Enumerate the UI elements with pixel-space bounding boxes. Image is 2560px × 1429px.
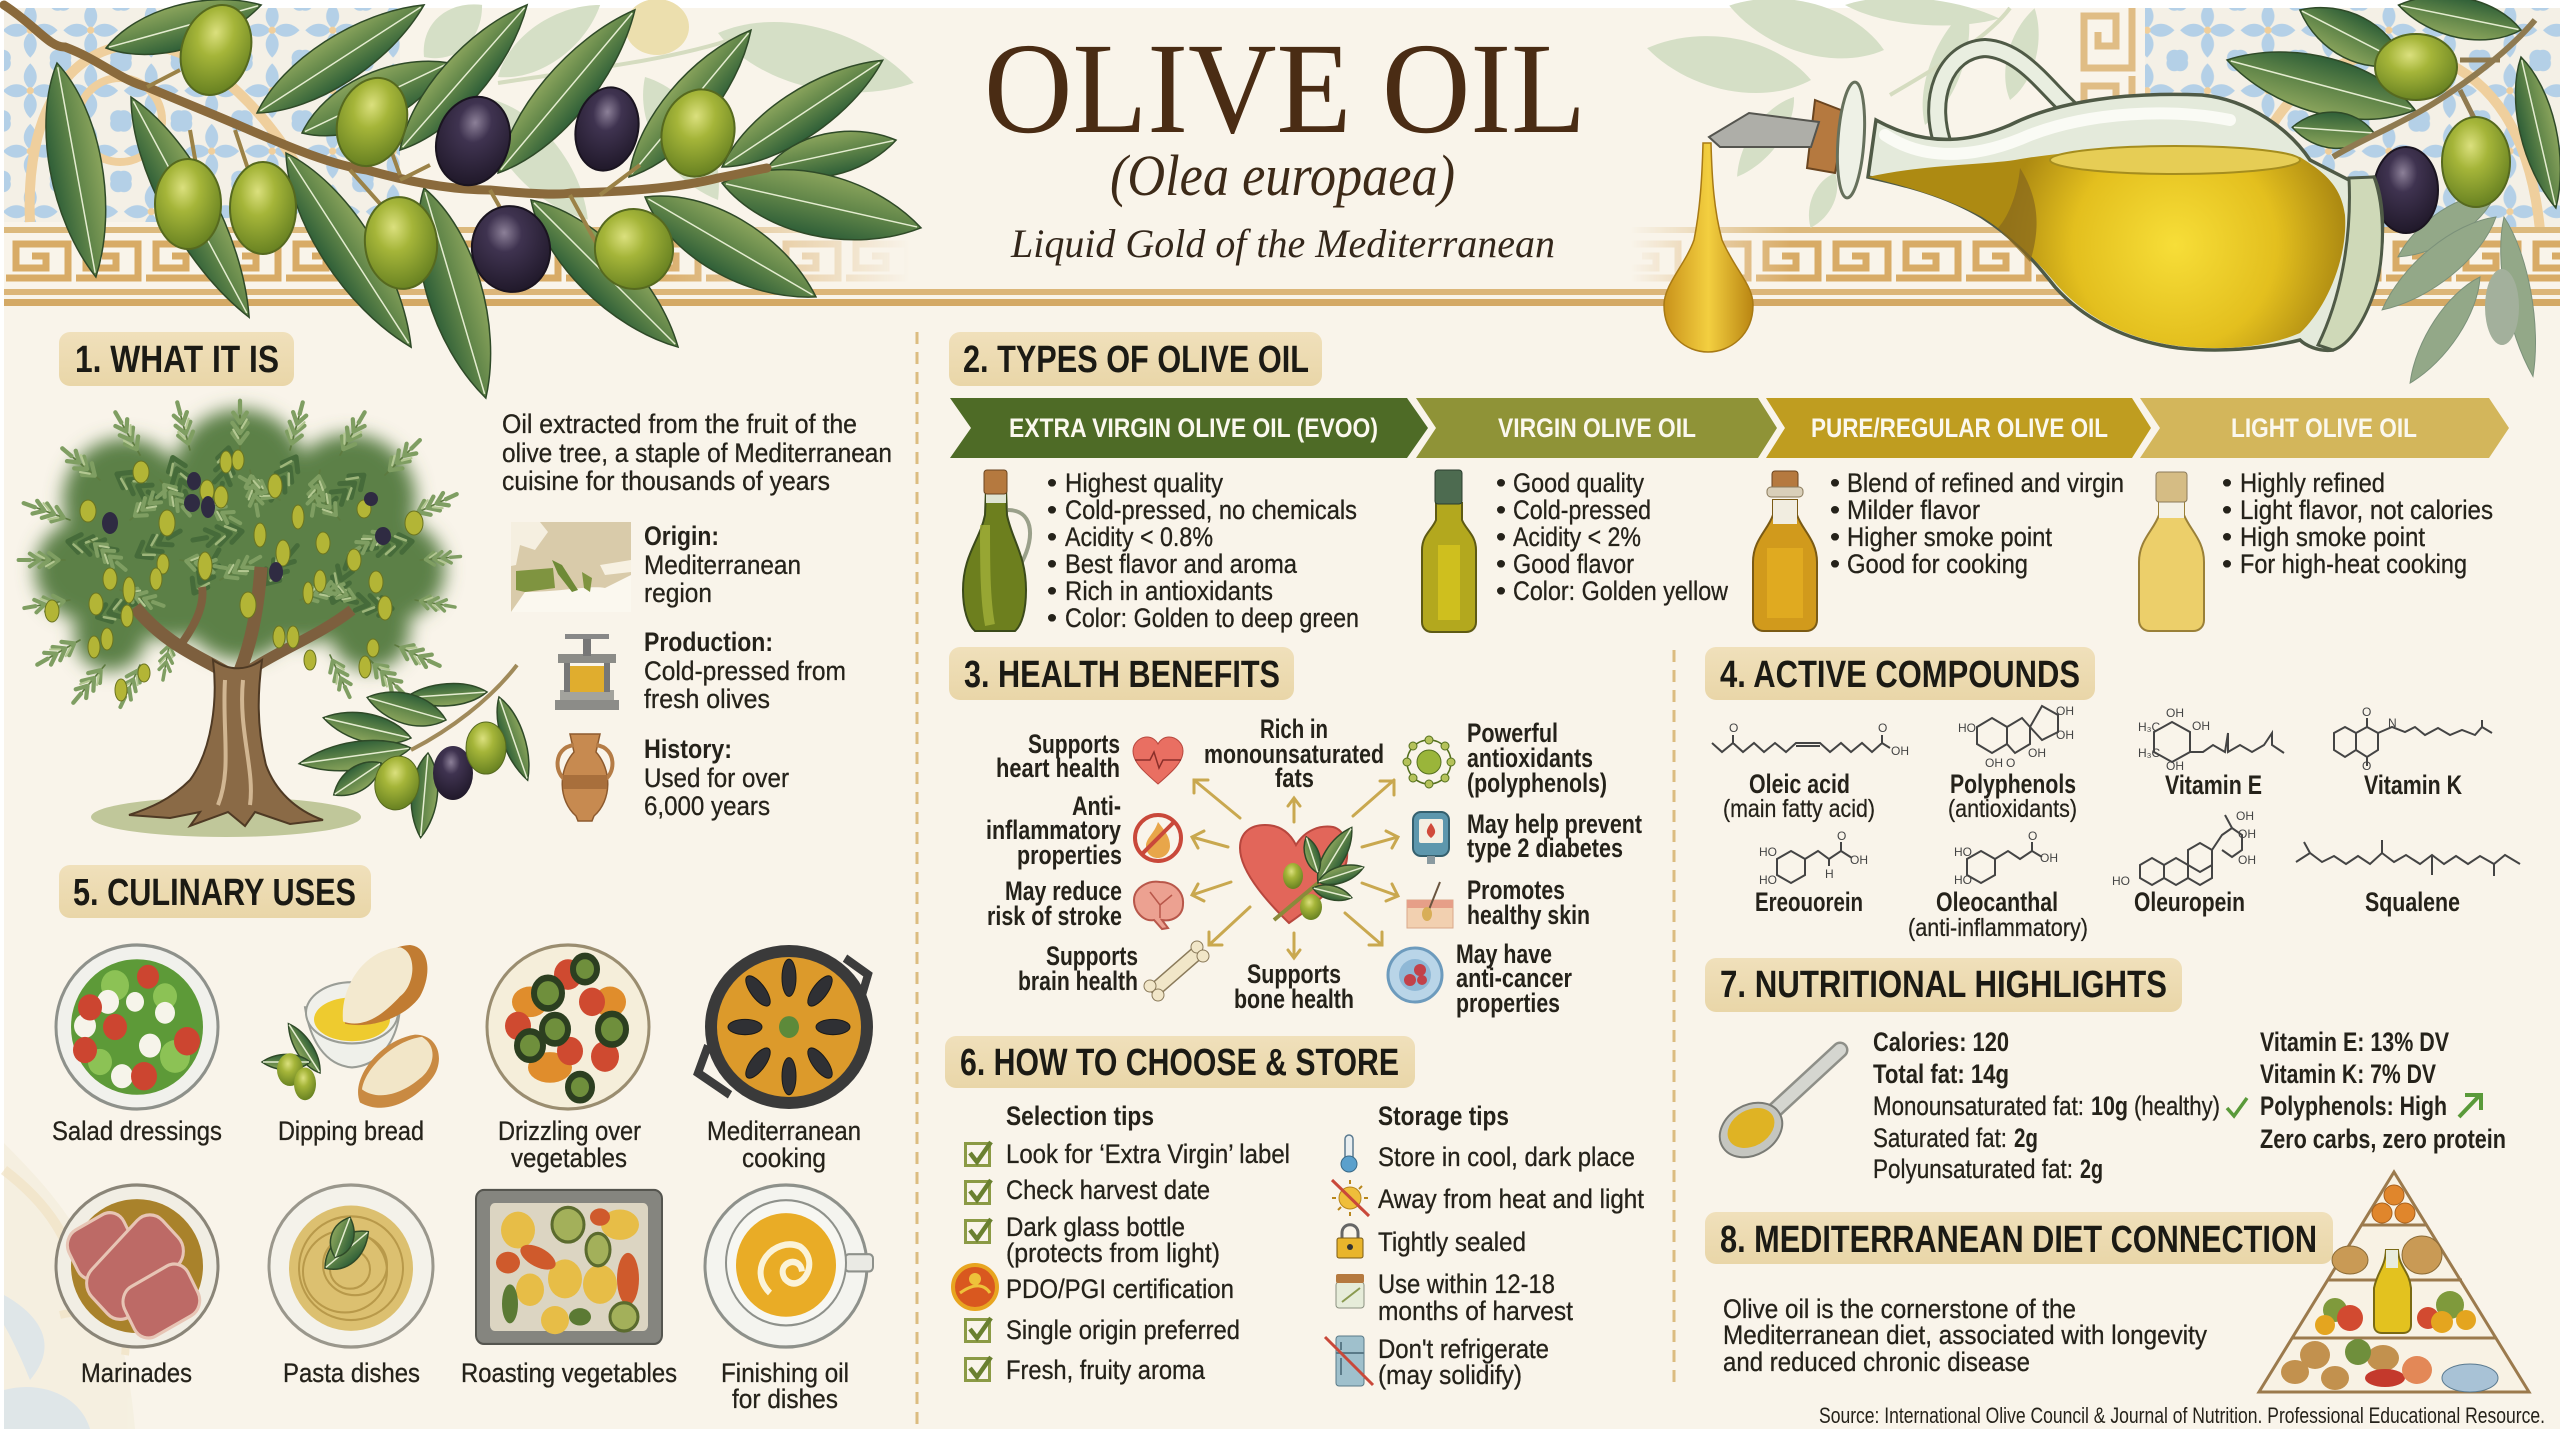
benefit: antioxidants: (polyphenols) — [1467, 768, 1607, 798]
compound: vitamin E: Vitamin E — [2165, 770, 2262, 800]
label: mediterranean cooking: cooking — [742, 1143, 826, 1173]
compound: oleuropein — [2112, 809, 2256, 917]
intro text — [502, 409, 892, 496]
list: virgin: Color: Golden yellow — [1513, 576, 1728, 606]
compound: oleuropein: OH — [2238, 827, 2256, 841]
label: drizzling — [498, 1116, 641, 1173]
list: nutrition left: Calories: 120 — [1873, 1027, 2009, 1057]
column: storage tips: months of harvest — [1378, 1296, 1573, 1326]
text: history: History: — [644, 734, 732, 764]
panel: nutritional highlights — [1705, 958, 2506, 1184]
compound: polyphenols: O — [2006, 756, 2015, 770]
text: production: Production: — [644, 627, 773, 657]
banner: light — [2140, 398, 2509, 458]
list: nutrition left: Monounsaturated fat: — [1873, 1091, 2084, 1121]
list: virgin: • — [1496, 549, 1506, 579]
heading: health benefits: 3. HEALTH BENEFITS — [964, 654, 1280, 696]
illustration: heart with olive sprig — [1240, 822, 1366, 923]
panel: health benefits — [949, 647, 1642, 1018]
label: roasting vegetables: Roasting vegetables — [461, 1358, 677, 1388]
list: pure: Higher smoke point — [1847, 522, 2052, 552]
list: nutrition right: Vitamin E: 13% DV — [2260, 1027, 2449, 1057]
column: selection tips: Selection tips — [1006, 1101, 1154, 1131]
compound: vitamin E: OH — [2166, 759, 2184, 773]
list: virgin: • — [1496, 576, 1506, 606]
label: pasta dishes: Pasta dishes — [283, 1358, 420, 1388]
list: nutrition right: Vitamin K: 7% DV — [2260, 1059, 2436, 1089]
title: OLIVE OIL — [984, 17, 1586, 161]
list: light — [2222, 468, 2493, 579]
compound: oleocanthal — [1908, 829, 2088, 942]
banner: extra virgin — [950, 398, 1428, 458]
icon: map of Mediterranean — [511, 522, 631, 612]
list: EVOO: • — [1047, 468, 1057, 498]
compound: oleic acid: (main fatty acid) — [1723, 795, 1875, 823]
compound: oleocanthal: HO — [1954, 845, 1972, 859]
text: production: Cold-pressed from — [644, 656, 846, 686]
text: production: fresh olives — [644, 684, 770, 714]
column: selection tips: Fresh, fruity aroma — [1006, 1355, 1206, 1385]
list: EVOO: • — [1047, 495, 1057, 525]
list: light: High smoke point — [2240, 522, 2425, 552]
panel: mediterranean diet connection — [1705, 1172, 2529, 1392]
list: pure: • — [1830, 549, 1840, 579]
column: selection tips: (protects from light) — [1006, 1238, 1220, 1268]
benefit: stroke: risk of stroke — [987, 901, 1122, 931]
list: nutrition left: 10g — [2091, 1091, 2128, 1121]
text: origin: Mediterranean — [644, 550, 801, 580]
heading: diet connection: 8. MEDITERRANEAN DIET CONNECTION — [1720, 1219, 2317, 1261]
list: light: Highly refined — [2240, 468, 2385, 498]
list: nutrition right: Zero carbs, zero protein — [2260, 1124, 2506, 1154]
column: storage tips: Away from heat and light — [1378, 1184, 1644, 1214]
list: virgin: • — [1496, 468, 1506, 498]
intro text: olive tree, a staple of Mediterranean — [502, 438, 892, 468]
list: nutrition right: Polyphenols: High — [2260, 1091, 2447, 1121]
benefit: monounsaturated fats — [1204, 714, 1384, 793]
benefit: skin — [1407, 875, 1590, 930]
list: virgin: Cold-pressed — [1513, 495, 1651, 525]
item: finishing oil — [705, 1185, 873, 1347]
label: drizzling: vegetables — [511, 1143, 627, 1173]
benefit: diabetes: type 2 diabetes — [1467, 833, 1623, 863]
text: diet paragraph: Olive oil is the cornerstone of the — [1723, 1294, 2076, 1324]
item: pasta dishes — [269, 1185, 433, 1347]
compound: polyphenols: (antioxidants) — [1948, 795, 2077, 823]
benefit: antioxidants: antioxidants — [1467, 743, 1593, 773]
text: history — [644, 734, 789, 821]
compound: squalene — [2296, 840, 2520, 917]
label: mediterranean cooking — [707, 1116, 861, 1173]
text: origin: region — [644, 578, 712, 608]
banner: virgin — [1416, 398, 1777, 458]
list: EVOO: Cold-pressed, no chemicals — [1065, 495, 1357, 525]
text: diet paragraph: Mediterranean diet, associated with longevity — [1723, 1320, 2207, 1350]
compound: vitamin K: Vitamin K — [2364, 770, 2462, 800]
item: dipping bread — [262, 945, 439, 1108]
benefit: bone health — [1234, 959, 1354, 1014]
list: EVOO — [1047, 468, 1359, 633]
panel: types of olive oil — [949, 332, 2509, 633]
list: EVOO: • — [1047, 576, 1057, 606]
banner: pure regular — [1766, 398, 2151, 458]
list: light: • — [2222, 468, 2232, 498]
label: finishing oil: for dishes — [732, 1384, 838, 1414]
list: nutrition left — [1873, 1027, 2247, 1184]
text: diet paragraph — [1723, 1294, 2207, 1377]
list: light: • — [2222, 495, 2232, 525]
compound: ereouorein: H — [1825, 867, 1834, 881]
column: storage tips: Use within 12-18 — [1378, 1269, 1555, 1299]
compound: polyphenols: OH — [2056, 728, 2074, 742]
compound: polyphenols: Polyphenols — [1950, 769, 2076, 799]
list: pure: Milder flavor — [1847, 495, 1980, 525]
compound: oleic acid: Oleic acid — [1749, 769, 1850, 799]
label: dipping bread: Dipping bread — [278, 1116, 424, 1146]
illustration: olive branch, top left — [4, 0, 928, 406]
heading: diet connection — [1705, 1212, 2333, 1264]
compound: vitamin E: OH — [2166, 706, 2184, 720]
benefit: anti-cancer — [1388, 939, 1572, 1018]
compound: vitamin E — [2138, 706, 2284, 800]
label: drizzling: Drizzling over — [498, 1116, 641, 1146]
compound: vitamin K: O — [2362, 705, 2371, 719]
text: history: 6,000 years — [644, 791, 770, 821]
benefit: diabetes — [1413, 809, 1642, 864]
benefit: heart health: Supports — [1028, 729, 1120, 759]
list: EVOO: Highest quality — [1065, 468, 1223, 498]
compound: vitamin K: O — [2362, 759, 2371, 773]
banner: light: LIGHT OLIVE OIL — [2231, 413, 2417, 443]
column: selection tips: Dark glass bottle — [1006, 1212, 1185, 1242]
text: origin — [644, 521, 801, 608]
compound: oleic acid — [1712, 721, 1909, 823]
tagline: Liquid Gold of the Mediterranean — [1010, 221, 1555, 266]
list: light: • — [2222, 549, 2232, 579]
compound: oleocanthal: OH — [2040, 851, 2058, 865]
compound: vitamin E: H₃C — [2138, 746, 2161, 760]
icon: olive press — [555, 634, 619, 710]
column: storage tips — [1325, 1101, 1644, 1390]
compound: squalene: Squalene — [2365, 887, 2460, 917]
list: light: For high-heat cooking — [2240, 549, 2467, 579]
benefit: anti-inflammatory: properties — [1017, 840, 1122, 870]
list: nutrition left: Saturated fat: — [1873, 1123, 2007, 1153]
benefit: skin: healthy skin — [1467, 900, 1590, 930]
benefit: brain health: brain health — [1018, 966, 1138, 996]
heading: types of olive oil — [949, 332, 1322, 386]
compound: oleic acid: OH — [1891, 744, 1909, 758]
benefit: heart health: heart health — [996, 753, 1120, 783]
compound: vitamin E: OH — [2192, 719, 2210, 733]
compound: oleuropein: Oleuropein — [2134, 887, 2245, 917]
benefit: skin: Promotes — [1467, 875, 1565, 905]
column: storage tips: Storage tips — [1378, 1101, 1509, 1131]
benefit: anti-cancer: properties — [1456, 988, 1560, 1018]
list: pure — [1830, 468, 2124, 579]
benefit: anti-inflammatory: inflammatory — [986, 815, 1121, 845]
banner: extra virgin: EXTRA VIRGIN OLIVE OIL (EVOO) — [1009, 413, 1378, 443]
label: finishing oil: Finishing oil — [721, 1358, 849, 1388]
column: selection tips: Look for ‘Extra Virgin’ label — [1006, 1139, 1290, 1169]
compound: vitamin K — [2334, 705, 2492, 800]
list: virgin: Good flavor — [1513, 549, 1634, 579]
list: virgin: Acidity < 2% — [1513, 522, 1641, 552]
illustration: olive sprig — [297, 665, 538, 839]
list: light: • — [2222, 522, 2232, 552]
panel: what it is — [19, 332, 892, 839]
text: diet paragraph: and reduced chronic disease — [1723, 1347, 2030, 1377]
banner: virgin: VIRGIN OLIVE OIL — [1498, 413, 1696, 443]
item: drizzling over vegetables — [487, 945, 649, 1109]
list: virgin: • — [1496, 495, 1506, 525]
heading: choose and store — [945, 1036, 1415, 1088]
list: nutrition left: Total fat: 14g — [1873, 1059, 2009, 1089]
column: storage tips: Tightly sealed — [1378, 1227, 1526, 1257]
compound: ereouorein — [1755, 829, 1868, 917]
label: marinades: Marinades — [81, 1358, 192, 1388]
benefit: brain health: Supports — [1046, 941, 1138, 971]
header decoration: tile corners and key bands — [4, 8, 2560, 306]
list: pure: Blend of refined and virgin — [1847, 468, 2124, 498]
heading: choose and store: 6. HOW TO CHOOSE & STORE — [960, 1042, 1399, 1084]
divider: left column — [916, 332, 918, 1429]
item: salad dressings — [56, 945, 218, 1109]
benefit: anti-cancer: May have — [1456, 939, 1552, 969]
illustration: olive tree — [19, 400, 461, 837]
benefit: anti-cancer: anti-cancer — [1456, 963, 1572, 993]
icon: light bottle — [2139, 472, 2204, 631]
compound: polyphenols: HO — [1958, 721, 1976, 735]
heading: culinary uses: 5. CULINARY USES — [73, 872, 356, 914]
list: pure: • — [1830, 495, 1840, 525]
heading: nutritional highlights: 7. NUTRITIONAL HIGHLIGHTS — [1720, 964, 2167, 1006]
compound: polyphenols: OH — [1985, 756, 2003, 770]
list: virgin — [1496, 468, 1728, 606]
illustration: food pyramid — [2259, 1172, 2529, 1392]
item: roasting vegetables — [476, 1190, 662, 1344]
list: EVOO: Color: Golden to deep green — [1065, 603, 1359, 633]
panel: active compounds — [1705, 647, 2520, 942]
compound: oleocanthal: O — [2028, 829, 2037, 843]
compound: vitamin E: H₃C — [2138, 720, 2161, 734]
icon: amphora — [558, 734, 612, 821]
item: marinades — [56, 1185, 218, 1347]
compound: vitamin K: N — [2388, 716, 2397, 730]
heading: health benefits — [949, 647, 1294, 700]
list: light: Light flavor, not calories — [2240, 495, 2493, 525]
list: nutrition left: Polyunsaturated fat: — [1873, 1154, 2073, 1184]
intro text: Oil extracted from the fruit of the — [502, 409, 857, 439]
benefit: anti-inflammatory — [986, 791, 1181, 870]
heading: active compounds — [1705, 647, 2095, 700]
arrows from heart — [1192, 780, 1398, 958]
column: storage tips: (may solidify) — [1378, 1360, 1522, 1390]
label: salad dressings: Salad dressings — [52, 1116, 222, 1146]
compound: ereouorein: HO — [1759, 873, 1777, 887]
column: selection tips: Check harvest date — [1006, 1175, 1210, 1205]
list: virgin: • — [1496, 522, 1506, 552]
list: nutrition left: 2g — [2014, 1123, 2038, 1153]
compound: oleic acid: O — [1878, 721, 1887, 735]
compound: ereouorein: Ereouorein — [1755, 887, 1863, 917]
list: EVOO: • — [1047, 522, 1057, 552]
list: nutrition right — [2260, 1027, 2506, 1154]
list: EVOO: • — [1047, 549, 1057, 579]
column: storage tips: Don't refrigerate — [1378, 1334, 1549, 1364]
text: production — [644, 627, 846, 714]
benefit: antioxidants — [1403, 718, 1607, 798]
benefit: antioxidants: Powerful — [1467, 718, 1558, 748]
benefit: bone health: Supports — [1247, 959, 1341, 989]
text: origin: Origin: — [644, 521, 719, 551]
bottom-left faded tile decoration — [4, 1143, 135, 1429]
benefit: bone health: bone health — [1234, 984, 1354, 1014]
compound: ereouorein: OH — [1850, 853, 1868, 867]
panel: culinary uses — [52, 865, 873, 1414]
compound: polyphenols: OH — [2028, 746, 2046, 760]
divider: right column — [1672, 650, 1676, 1385]
compound: oleocanthal: Oleocanthal — [1936, 887, 2058, 917]
heading: active compounds: 4. ACTIVE COMPOUNDS — [1720, 654, 2080, 696]
heading: what it is — [59, 332, 294, 386]
compound: oleuropein: OH — [2236, 809, 2254, 823]
panel: how to choose and store — [945, 1036, 1644, 1390]
icon: pure bottle — [1753, 471, 1817, 631]
benefit: heart health — [996, 729, 1183, 784]
compound: oleuropein: HO — [2112, 874, 2130, 888]
subtitle: latin name: (Olea europaea) — [1110, 143, 1455, 208]
column: selection tips — [953, 1101, 1290, 1385]
compound: oleocanthal: HO — [1954, 873, 1972, 887]
benefit: monounsaturated fats: monounsaturated — [1204, 739, 1384, 769]
compound: polyphenols — [1948, 704, 2077, 823]
compound: ereouorein: O — [1837, 829, 1846, 843]
column: storage tips: Store in cool, dark place — [1378, 1142, 1635, 1172]
icon: spoon with oil — [1710, 1050, 1840, 1168]
list: nutrition left: 2g — [2080, 1154, 2103, 1184]
label: finishing oil — [721, 1358, 849, 1414]
list: EVOO: Best flavor and aroma — [1065, 549, 1298, 579]
benefit: brain health — [1018, 941, 1209, 1001]
heading: types of olive oil: 2. TYPES OF OLIVE OIL — [963, 339, 1309, 381]
item: mediterranean cooking paella — [698, 945, 873, 1109]
list: EVOO: • — [1047, 603, 1057, 633]
label: mediterranean cooking: Mediterranean — [707, 1116, 861, 1146]
list: nutrition left: (healthy) — [2134, 1091, 2220, 1121]
compound: polyphenols: OH — [2056, 704, 2074, 718]
heading: culinary uses — [59, 865, 371, 918]
icon: virgin bottle — [1422, 470, 1476, 632]
list: EVOO: Rich in antioxidants — [1065, 576, 1273, 606]
column: selection tips: PDO/PGI certification — [1006, 1274, 1234, 1304]
benefit: diabetes: May help prevent — [1467, 809, 1642, 839]
illustration: pouring olive oil bottle with branch — [1642, 0, 2560, 391]
column: selection tips: Single origin preferred — [1006, 1315, 1240, 1345]
list: pure: • — [1830, 522, 1840, 552]
compound: oleocanthal: (anti-inflammatory) — [1908, 914, 2088, 942]
list: pure: • — [1830, 468, 1840, 498]
text: history: Used for over — [644, 763, 789, 793]
benefit: monounsaturated fats: Rich in — [1260, 714, 1328, 744]
compound: oleic acid: O — [1729, 721, 1738, 735]
banner: pure regular: PURE/REGULAR OLIVE OIL — [1811, 413, 2108, 443]
benefit: stroke: May reduce — [1005, 876, 1122, 906]
icon: EVOO bottle — [963, 470, 1030, 631]
list: pure: Good for cooking — [1847, 549, 2028, 579]
benefit: anti-inflammatory: Anti- — [1072, 791, 1121, 821]
list: EVOO: Acidity < 0.8% — [1065, 522, 1213, 552]
heading: what it is: 1. WHAT IT IS — [75, 339, 279, 381]
heading: nutritional highlights — [1705, 958, 2182, 1012]
benefit: monounsaturated fats: fats — [1275, 763, 1314, 793]
list: virgin: Good quality — [1513, 468, 1644, 498]
compound: ereouorein: HO — [1759, 845, 1777, 859]
compound: oleuropein: OH — [2238, 853, 2256, 867]
benefit: stroke — [987, 876, 1183, 931]
intro text: cuisine for thousands of years — [502, 466, 830, 496]
